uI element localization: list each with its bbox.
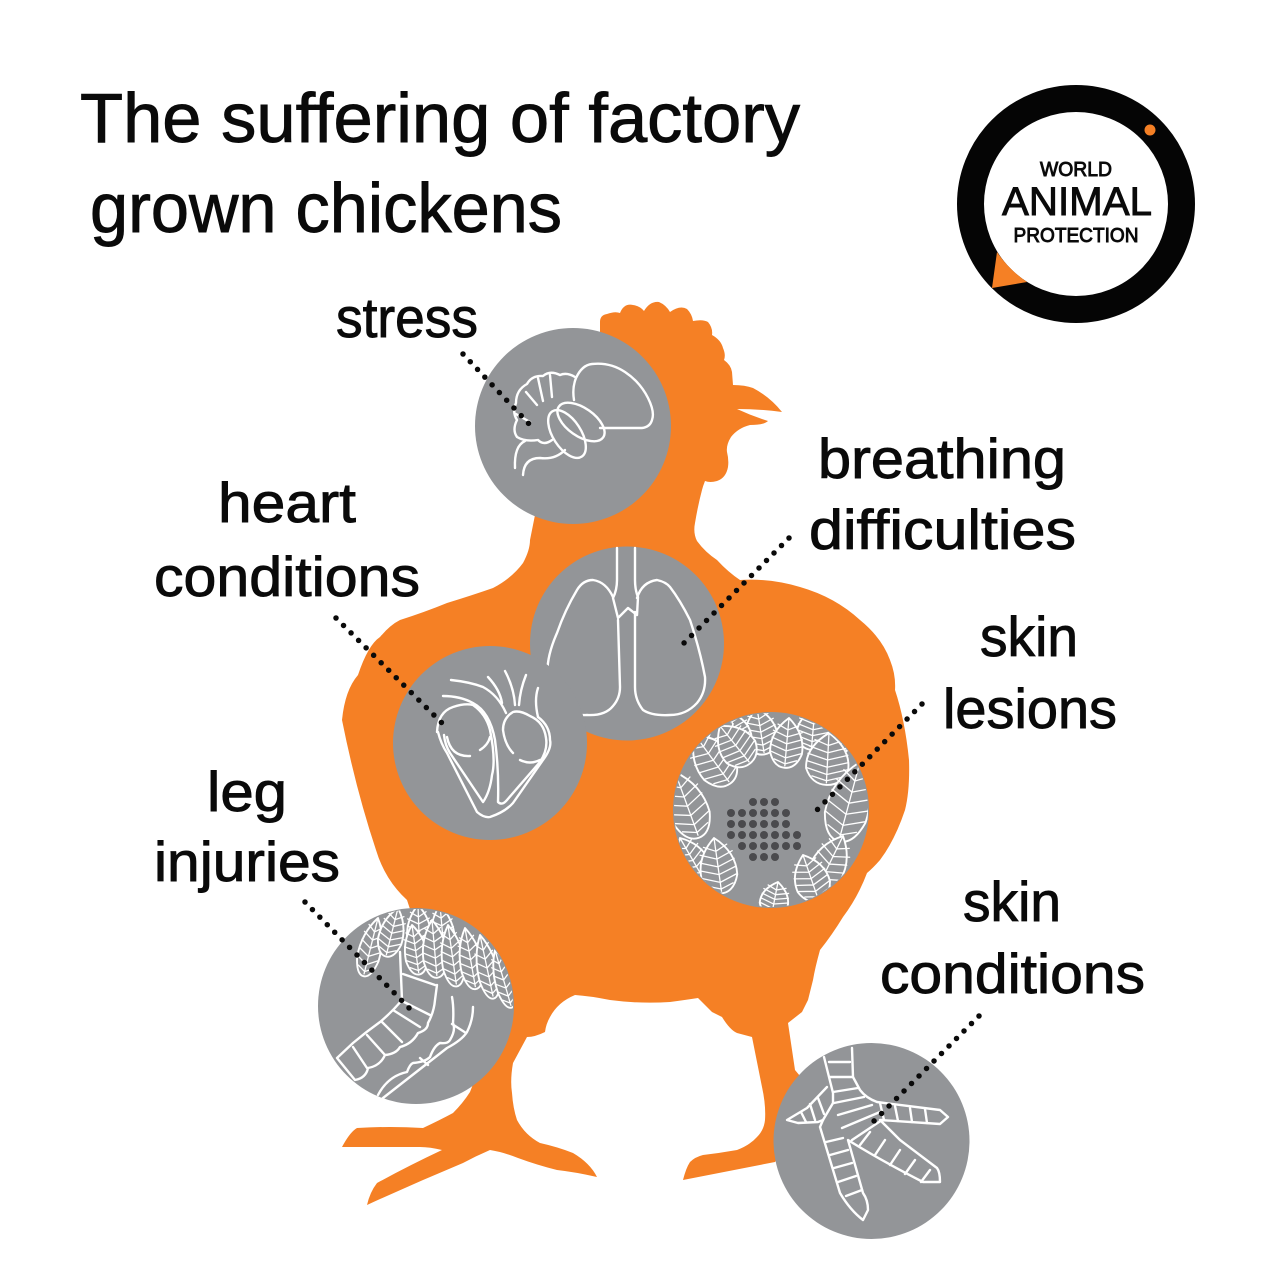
panel: heart conditions bbox=[393, 646, 587, 840]
label: leg injuries: injuries bbox=[154, 830, 340, 893]
title: grown chickens bbox=[90, 169, 562, 247]
connector: stress bbox=[463, 354, 531, 426]
label: leg injuries bbox=[154, 760, 340, 893]
panel: leg injuries bbox=[318, 904, 520, 1104]
title: The suffering of factory bbox=[80, 79, 800, 157]
logo: World Animal Protection: PROTECTION bbox=[1014, 225, 1138, 247]
label: skin conditions: skin bbox=[963, 870, 1061, 933]
label: breathing difficulties: difficulties bbox=[809, 498, 1076, 561]
logo: World Animal Protection: ANIMAL bbox=[1002, 180, 1152, 224]
label: breathing difficulties bbox=[809, 427, 1076, 561]
label: leg injuries: leg bbox=[207, 760, 287, 823]
panel: stress bbox=[475, 328, 671, 524]
label: breathing difficulties: breathing bbox=[818, 427, 1066, 490]
label: heart conditions bbox=[154, 471, 420, 608]
label: skin lesions: lesions bbox=[943, 677, 1117, 740]
logo: World Animal Protection: WORLD bbox=[1040, 159, 1112, 181]
logo: World Animal Protection bbox=[970, 98, 1182, 310]
label: skin lesions: skin bbox=[980, 605, 1078, 668]
connector: heart conditions bbox=[336, 618, 448, 729]
connector: leg injuries bbox=[305, 902, 415, 1014]
label: stress: stress bbox=[336, 286, 478, 349]
connector: skin lesions bbox=[811, 704, 922, 816]
panel: skin lesions bbox=[673, 712, 869, 908]
panel: skin conditions (foot) bbox=[774, 1043, 970, 1239]
connector: breathing difficulties bbox=[678, 538, 789, 649]
label: heart conditions: conditions bbox=[154, 545, 420, 608]
label: skin conditions: conditions bbox=[880, 942, 1145, 1005]
chicken silhouette bbox=[342, 302, 909, 1205]
label: skin lesions bbox=[943, 605, 1117, 740]
panel: breathing difficulties (lungs) bbox=[530, 546, 724, 740]
label: heart conditions: heart bbox=[218, 471, 356, 534]
connector: skin conditions bbox=[869, 1016, 979, 1126]
label: skin conditions bbox=[880, 870, 1145, 1005]
title bbox=[80, 79, 800, 247]
